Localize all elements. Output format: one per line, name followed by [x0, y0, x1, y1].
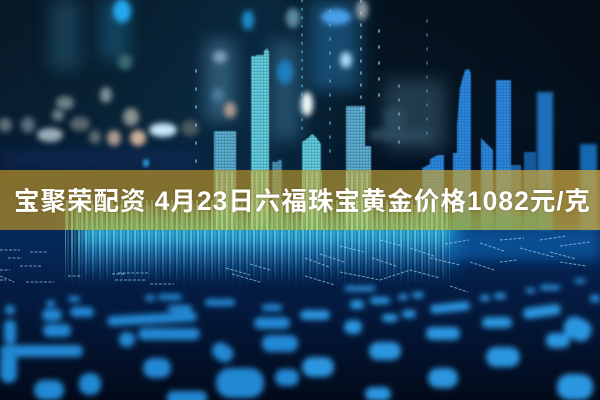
- bars: center tower: [346, 106, 371, 230]
- blurred bokeh lights, upper right: [301, 0, 430, 140]
- bars: soft blue tower: [537, 92, 553, 230]
- banner: translucent gold strip: [0, 170, 600, 230]
- bars: steps mid right: [422, 155, 444, 230]
- background haze and vertical light columns: [0, 0, 445, 170]
- bars: tall teal tower: [251, 48, 269, 230]
- bars: blue tower: [496, 80, 511, 230]
- bars: short teal tower: [214, 131, 236, 230]
- blurred bokeh lights, upper left: [0, 0, 300, 167]
- bars: far right block: [580, 144, 597, 230]
- bar chart: dotted data bars: [214, 48, 597, 230]
- lower grid: fine digital traces: [0, 236, 590, 292]
- lower grid: blurred key lights, left: [0, 294, 299, 400]
- bars: right blue: [481, 138, 493, 230]
- lower grid: blurred key lights, right: [300, 279, 600, 400]
- rising dotted light strands: [196, 0, 427, 170]
- lower grid: cyan glow behind the horizon: [80, 225, 460, 280]
- bars: tall blue peak: [453, 69, 471, 230]
- bars: low steps: [272, 160, 282, 230]
- bars: peaked teal: [302, 134, 321, 230]
- title: 宝聚荣配资 4月23日六福珠宝黄金价格1082元/克: [14, 186, 591, 216]
